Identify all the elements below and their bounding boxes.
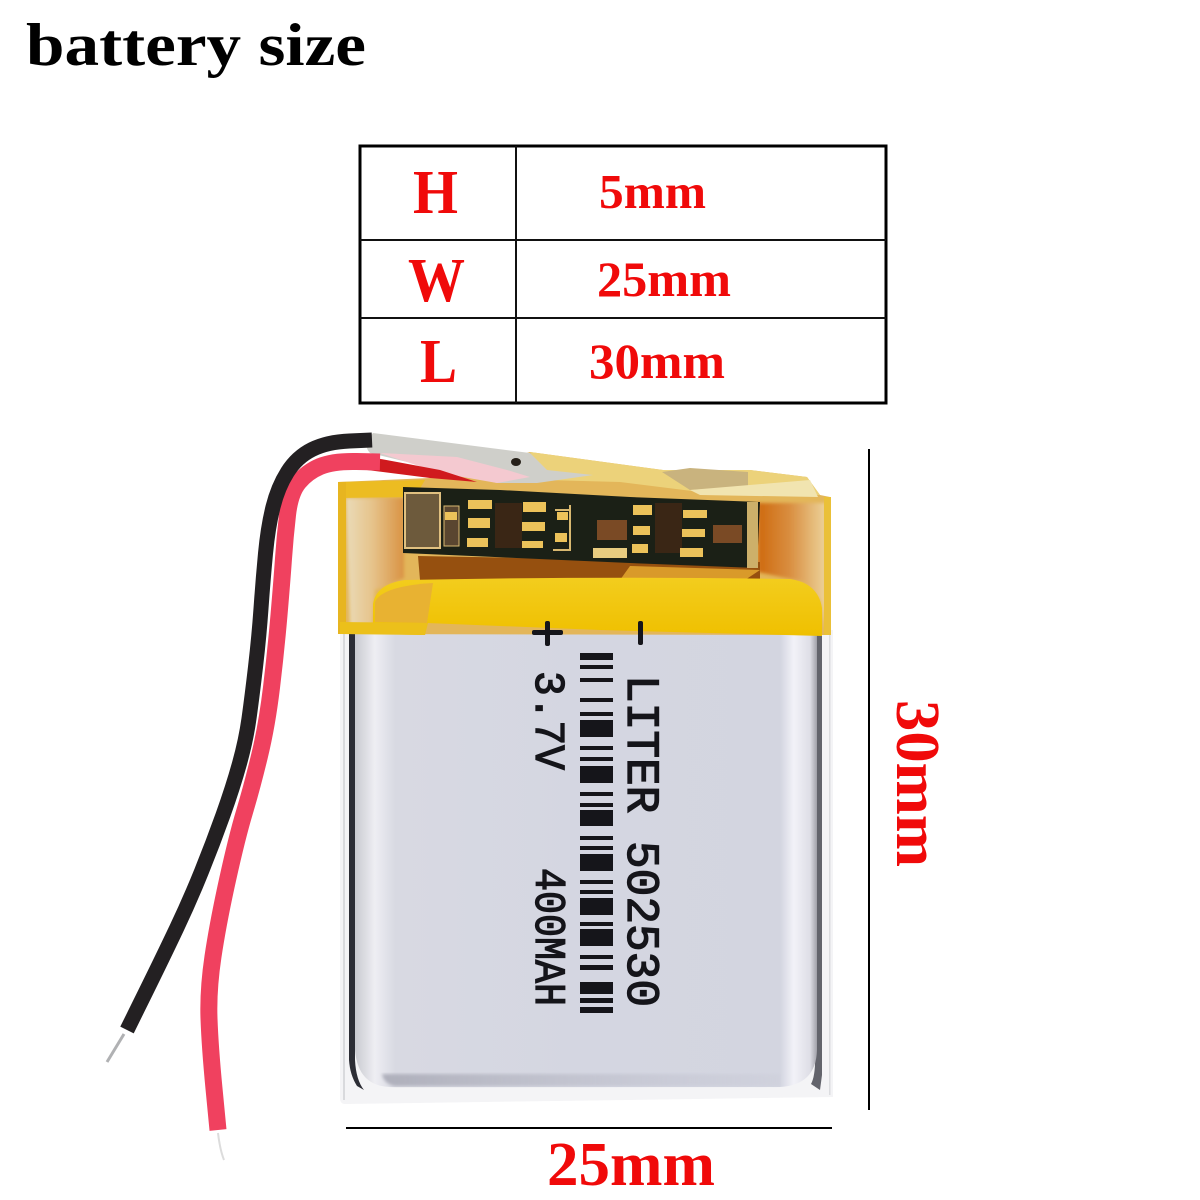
gold solder pads [445,500,707,558]
row: height [413,159,706,227]
row: length: L [420,328,457,396]
tape and protection circuit [338,433,831,636]
dimension: height line [868,449,870,1110]
row: height: H [413,159,458,227]
row: width [408,247,731,315]
red wire [209,461,380,1160]
yellow cell shoulder [373,578,822,636]
title: battery size [26,12,366,78]
nickel tab [367,433,593,483]
silver battery body [340,630,833,1104]
battery label: 400MAH: 400MAH [522,868,572,1006]
clear tape base [338,452,830,635]
battery label: LITER 502530: LITER 502530 [614,675,666,1007]
battery label: plus and minus polarity [532,621,643,646]
row: length: 30mm [589,333,725,389]
black wire [107,440,372,1062]
size table [360,146,886,403]
circuit board [403,487,760,568]
battery [338,433,833,1104]
row: height: 5mm [599,164,706,219]
dimension label: 30mm: 30mm [883,700,951,867]
amber strip under circuit [418,556,760,580]
barcode [580,653,613,1013]
dimension: width line [346,1127,832,1129]
row: width: 25mm [597,251,731,307]
battery label: 3.7V: 3.7V [523,671,572,770]
dimension label: 25mm: 25mm [547,1131,715,1199]
row: width: W [408,247,465,315]
row: length [420,328,725,396]
